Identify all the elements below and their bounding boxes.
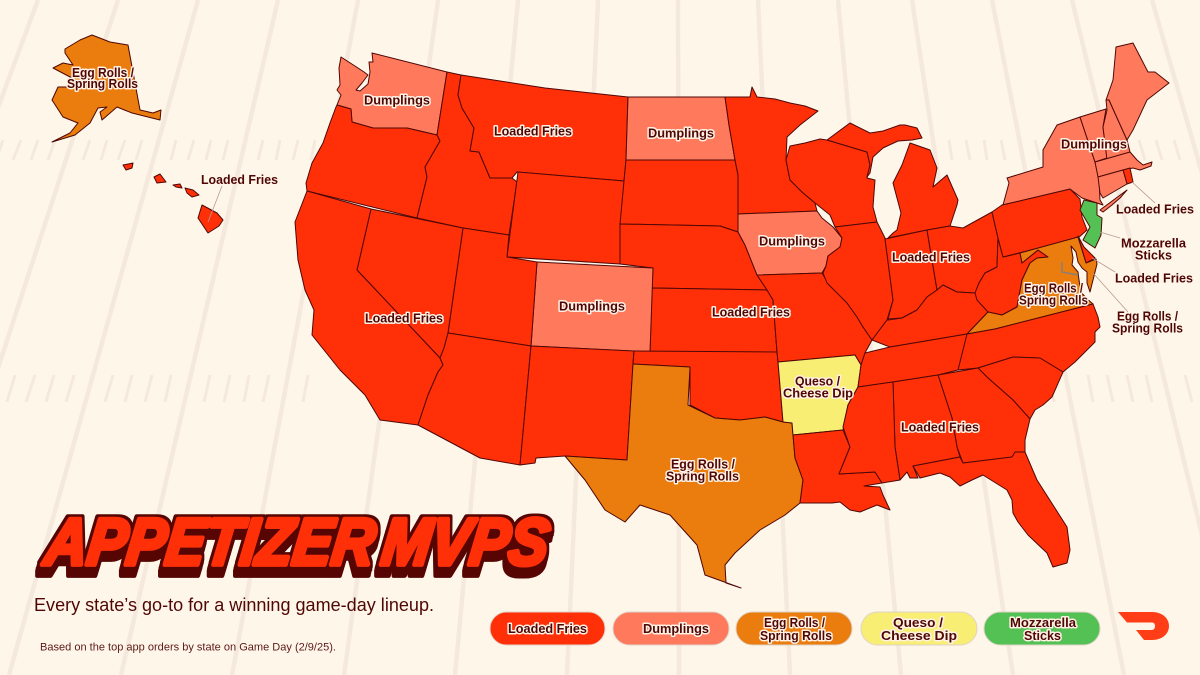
legend item: Egg Rolls / Spring Rolls: Egg Rolls / xyxy=(764,615,825,630)
legend item: Egg Rolls / Spring Rolls xyxy=(736,612,852,645)
legend item: Mozzarella Sticks: Mozzarella xyxy=(1010,615,1077,630)
callout: New Jersey xyxy=(1121,236,1187,262)
legend item: Mozzarella Sticks xyxy=(984,612,1100,645)
callout leader lines xyxy=(208,182,1155,312)
legend item: Loaded Fries: Loaded Fries xyxy=(508,621,587,636)
label: Virginia xyxy=(1019,280,1088,308)
callout: New Jersey: Mozzarella xyxy=(1121,236,1187,250)
callout: Maryland: Egg Rolls / xyxy=(1117,308,1178,324)
label: Washington: Dumplings xyxy=(364,92,430,108)
label: Texas: Egg Rolls / xyxy=(671,456,735,472)
label: Kansas: Loaded Fries xyxy=(712,304,790,320)
label: Southeast: Loaded Fries xyxy=(901,420,979,434)
label: Arkansas xyxy=(783,374,853,400)
legend item: Mozzarella Sticks: Sticks xyxy=(1024,628,1061,643)
callout: Delaware: Loaded Fries xyxy=(1115,270,1193,286)
callout: Maryland xyxy=(1112,308,1183,336)
label: Montana: Loaded Fries xyxy=(494,124,572,138)
footnote: Based on the top app orders by state on Game Day (2/9/25). xyxy=(40,642,336,654)
label: New York and New England: Dumplings xyxy=(1061,136,1127,152)
legend item: Dumplings: Dumplings xyxy=(643,621,709,636)
label: Arkansas: Queso / xyxy=(795,374,840,388)
label: Virginia: Egg Rolls / xyxy=(1024,280,1083,296)
US state map xyxy=(295,43,1169,588)
callout: New Jersey: Sticks xyxy=(1135,248,1172,262)
legend xyxy=(490,612,1100,645)
label: California: Loaded Fries xyxy=(365,310,443,326)
icon: DoorDash logo xyxy=(1118,612,1169,640)
label: Colorado: Dumplings xyxy=(559,298,625,314)
legend item: Dumplings xyxy=(613,612,729,645)
label: Arkansas: Cheese Dip xyxy=(783,386,853,400)
label: Alaska xyxy=(67,65,138,91)
map: Alaska xyxy=(52,35,161,142)
map: Hawaii xyxy=(123,163,223,233)
label: Texas: Spring Rolls xyxy=(666,468,739,484)
label: Texas xyxy=(666,456,739,484)
label: Virginia: Spring Rolls xyxy=(1019,292,1088,308)
legend item: Loaded Fries xyxy=(490,612,605,645)
label: Alaska: Spring Rolls xyxy=(67,76,138,91)
legend item: Queso / Cheese Dip: Queso / xyxy=(893,615,943,630)
callout: Rhode Island: Loaded Fries xyxy=(1116,202,1194,216)
legend item: Queso / Cheese Dip: Cheese Dip xyxy=(881,628,957,643)
label: Hawaii: Loaded Fries xyxy=(201,172,278,187)
legend item: Queso / Cheese Dip xyxy=(861,612,977,645)
legend item: Egg Rolls / Spring Rolls: Spring Rolls xyxy=(760,628,832,643)
label: Midwest: Loaded Fries xyxy=(892,250,970,264)
title: APPETIZER MVPS xyxy=(39,506,553,579)
callout: Maryland: Spring Rolls xyxy=(1112,320,1183,336)
label: Alaska: Egg Rolls / xyxy=(72,65,134,80)
subtitle: Every state’s go-to for a winning game-day lineup. xyxy=(34,595,434,615)
label: Iowa: Dumplings xyxy=(759,234,825,248)
label: North Dakota: Dumplings xyxy=(648,126,714,140)
